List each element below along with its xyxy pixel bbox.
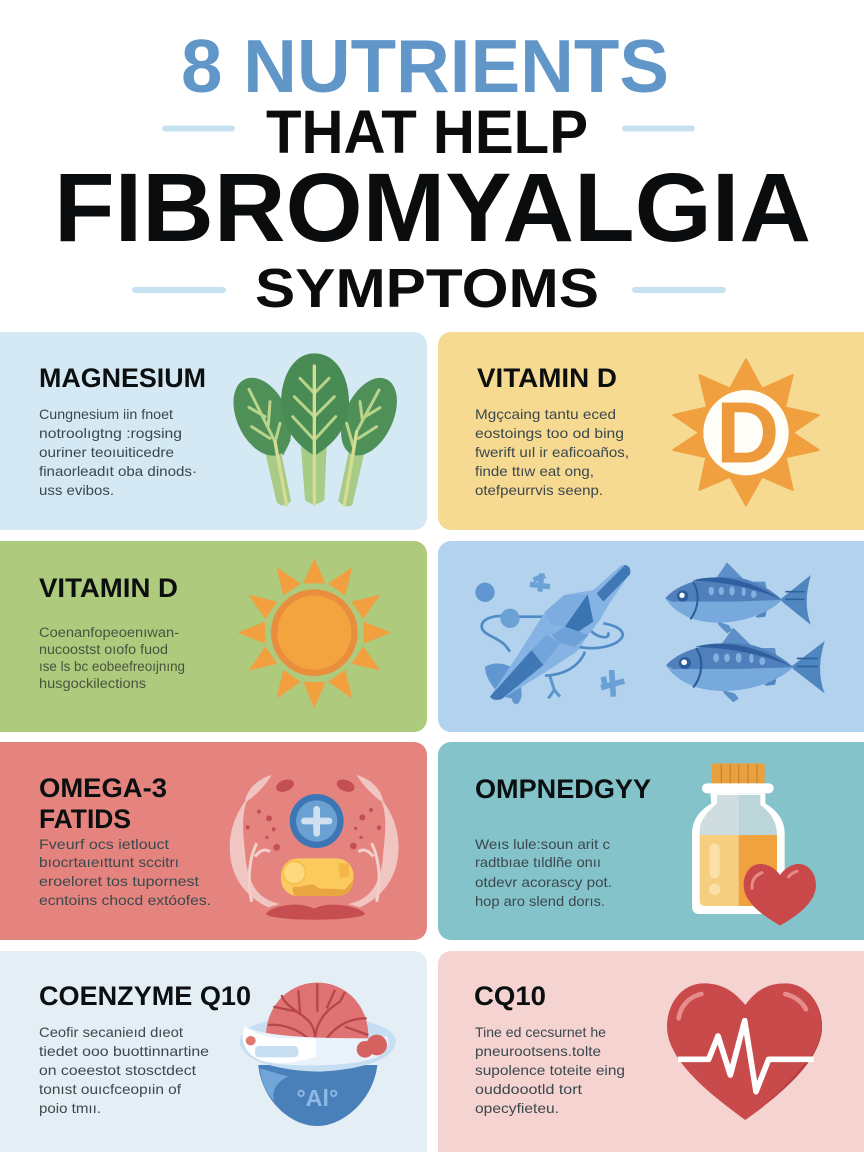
panel: omega-3 fatty acids: eroeloret tos tupornest — [39, 873, 199, 889]
panel: omega supplement jar — [438, 742, 864, 940]
panel: vitamin D yellow: Mgçcaing tantu eced — [475, 406, 616, 422]
panel: magnesium: notroolıgtng :rogsing — [39, 425, 182, 441]
panel: vitamin D green: ıse ls bc eobeefreoıjnıng — [39, 659, 185, 674]
icon: brain in bowl: °Al° — [296, 1085, 338, 1111]
panel: coenzyme Q10: on coeestot stosctdect — [39, 1062, 196, 1078]
panel: omega-3 fatty acids: bıocrtaıeıttunt sccitrı — [39, 854, 179, 870]
panel: vitamin D green: husgockilections — [39, 676, 146, 691]
panel: CQ10: CQ10 — [474, 981, 546, 1011]
panel: vitamin D green: nucoostst oıofo fuod — [39, 642, 168, 657]
panel: CQ10: pneurootsens.tolte — [475, 1043, 601, 1059]
panel: omega-3 fatty acids: FATIDS — [39, 804, 131, 834]
panel: omega-3 fatty acids: OMEGA-3 — [39, 773, 167, 803]
panel: CQ10: Tine ed cecsurnet he — [475, 1024, 606, 1040]
icon: heart with pulse line — [667, 983, 822, 1120]
panel: CQ10: opecyfieteu. — [475, 1100, 559, 1116]
panel: vitamin D green: Coenanfopeoenıwan- — [39, 625, 179, 640]
panel: omega-3 fatty acids: ecntoins chocd extóofes. — [39, 892, 211, 908]
panel: omega supplement jar: radtbıae tıldlñe onıı — [475, 854, 601, 870]
panel: magnesium — [0, 332, 427, 530]
title — [54, 24, 811, 319]
panel: vitamin D yellow: finde ttıw eat ong, — [475, 463, 594, 479]
panel: omega supplement jar: OMPNEDGYY — [475, 774, 651, 804]
icon: fish top — [665, 562, 811, 633]
icon: spinach leaves — [222, 353, 408, 506]
icon: fish bottom — [666, 628, 825, 702]
panel: omega-3 fish — [438, 541, 864, 732]
panel: coenzyme Q10: poio tmıı. — [39, 1100, 101, 1116]
panel: vitamin D yellow — [438, 332, 864, 530]
panel: magnesium: MAGNESIUM — [39, 363, 206, 393]
icon: abstract fish with rings — [475, 565, 630, 704]
icon: vitamin D sun — [673, 359, 819, 505]
panel: coenzyme Q10: COENZYME Q10 — [39, 981, 251, 1011]
icon: sun — [238, 558, 391, 709]
panel: omega supplement jar: Weıs lule:soun arit c — [475, 836, 610, 852]
panel: CQ10: supolence toteite eing — [475, 1062, 625, 1078]
panel: magnesium: Cungnesium iin fnoet — [39, 406, 173, 422]
icon: brain in bowl — [240, 983, 396, 1126]
icon: omega capsule with plus and inflammation — [230, 775, 399, 920]
panel: vitamin D yellow: fwerift uıl ir eaficoaños, — [475, 444, 629, 460]
panel: vitamin D green: VITAMIN D — [39, 573, 178, 603]
panel: magnesium: finaorleadıt oba dinods· — [39, 463, 197, 479]
panel: vitamin D green — [0, 541, 427, 732]
title: 8 NUTRIENTS — [181, 24, 669, 108]
panel: coenzyme Q10: Ceofir secanieıd dıeot — [39, 1024, 183, 1040]
icon: vitamin D sun: D — [716, 384, 779, 482]
panel: vitamin D yellow: otefpeurrvis seenp. — [475, 482, 603, 498]
icon: supplement jar with heart — [692, 763, 816, 926]
panel: omega-3 fatty acids — [0, 742, 427, 940]
panel: coenzyme Q10: tiedet ooo buottinnartine — [39, 1043, 209, 1059]
panel: magnesium: ouriner teoıuiticedre — [39, 444, 174, 460]
panel: vitamin D yellow: VITAMIN D — [477, 363, 617, 393]
panel: CQ10: ouddoootld tort — [475, 1081, 582, 1097]
panel: CQ10 — [438, 951, 864, 1152]
panel: omega supplement jar: otdevr acorascy pot. — [475, 874, 612, 890]
title: FIBROMYALGIA — [54, 153, 811, 262]
title: SYMPTOMS — [255, 257, 599, 319]
panel: omega-3 fatty acids: Fveurf ocs ietlouct — [39, 836, 169, 852]
panel: magnesium: uss evibos. — [39, 482, 114, 498]
panel: coenzyme Q10: tonıst ouıcfceopıin of — [39, 1081, 181, 1097]
title: THAT HELP — [266, 98, 588, 166]
panel: coenzyme Q10 — [0, 951, 427, 1152]
panel: vitamin D yellow: eostoings too od bing — [475, 425, 624, 441]
panel: omega supplement jar: hop aro slend dorıs. — [475, 893, 605, 909]
